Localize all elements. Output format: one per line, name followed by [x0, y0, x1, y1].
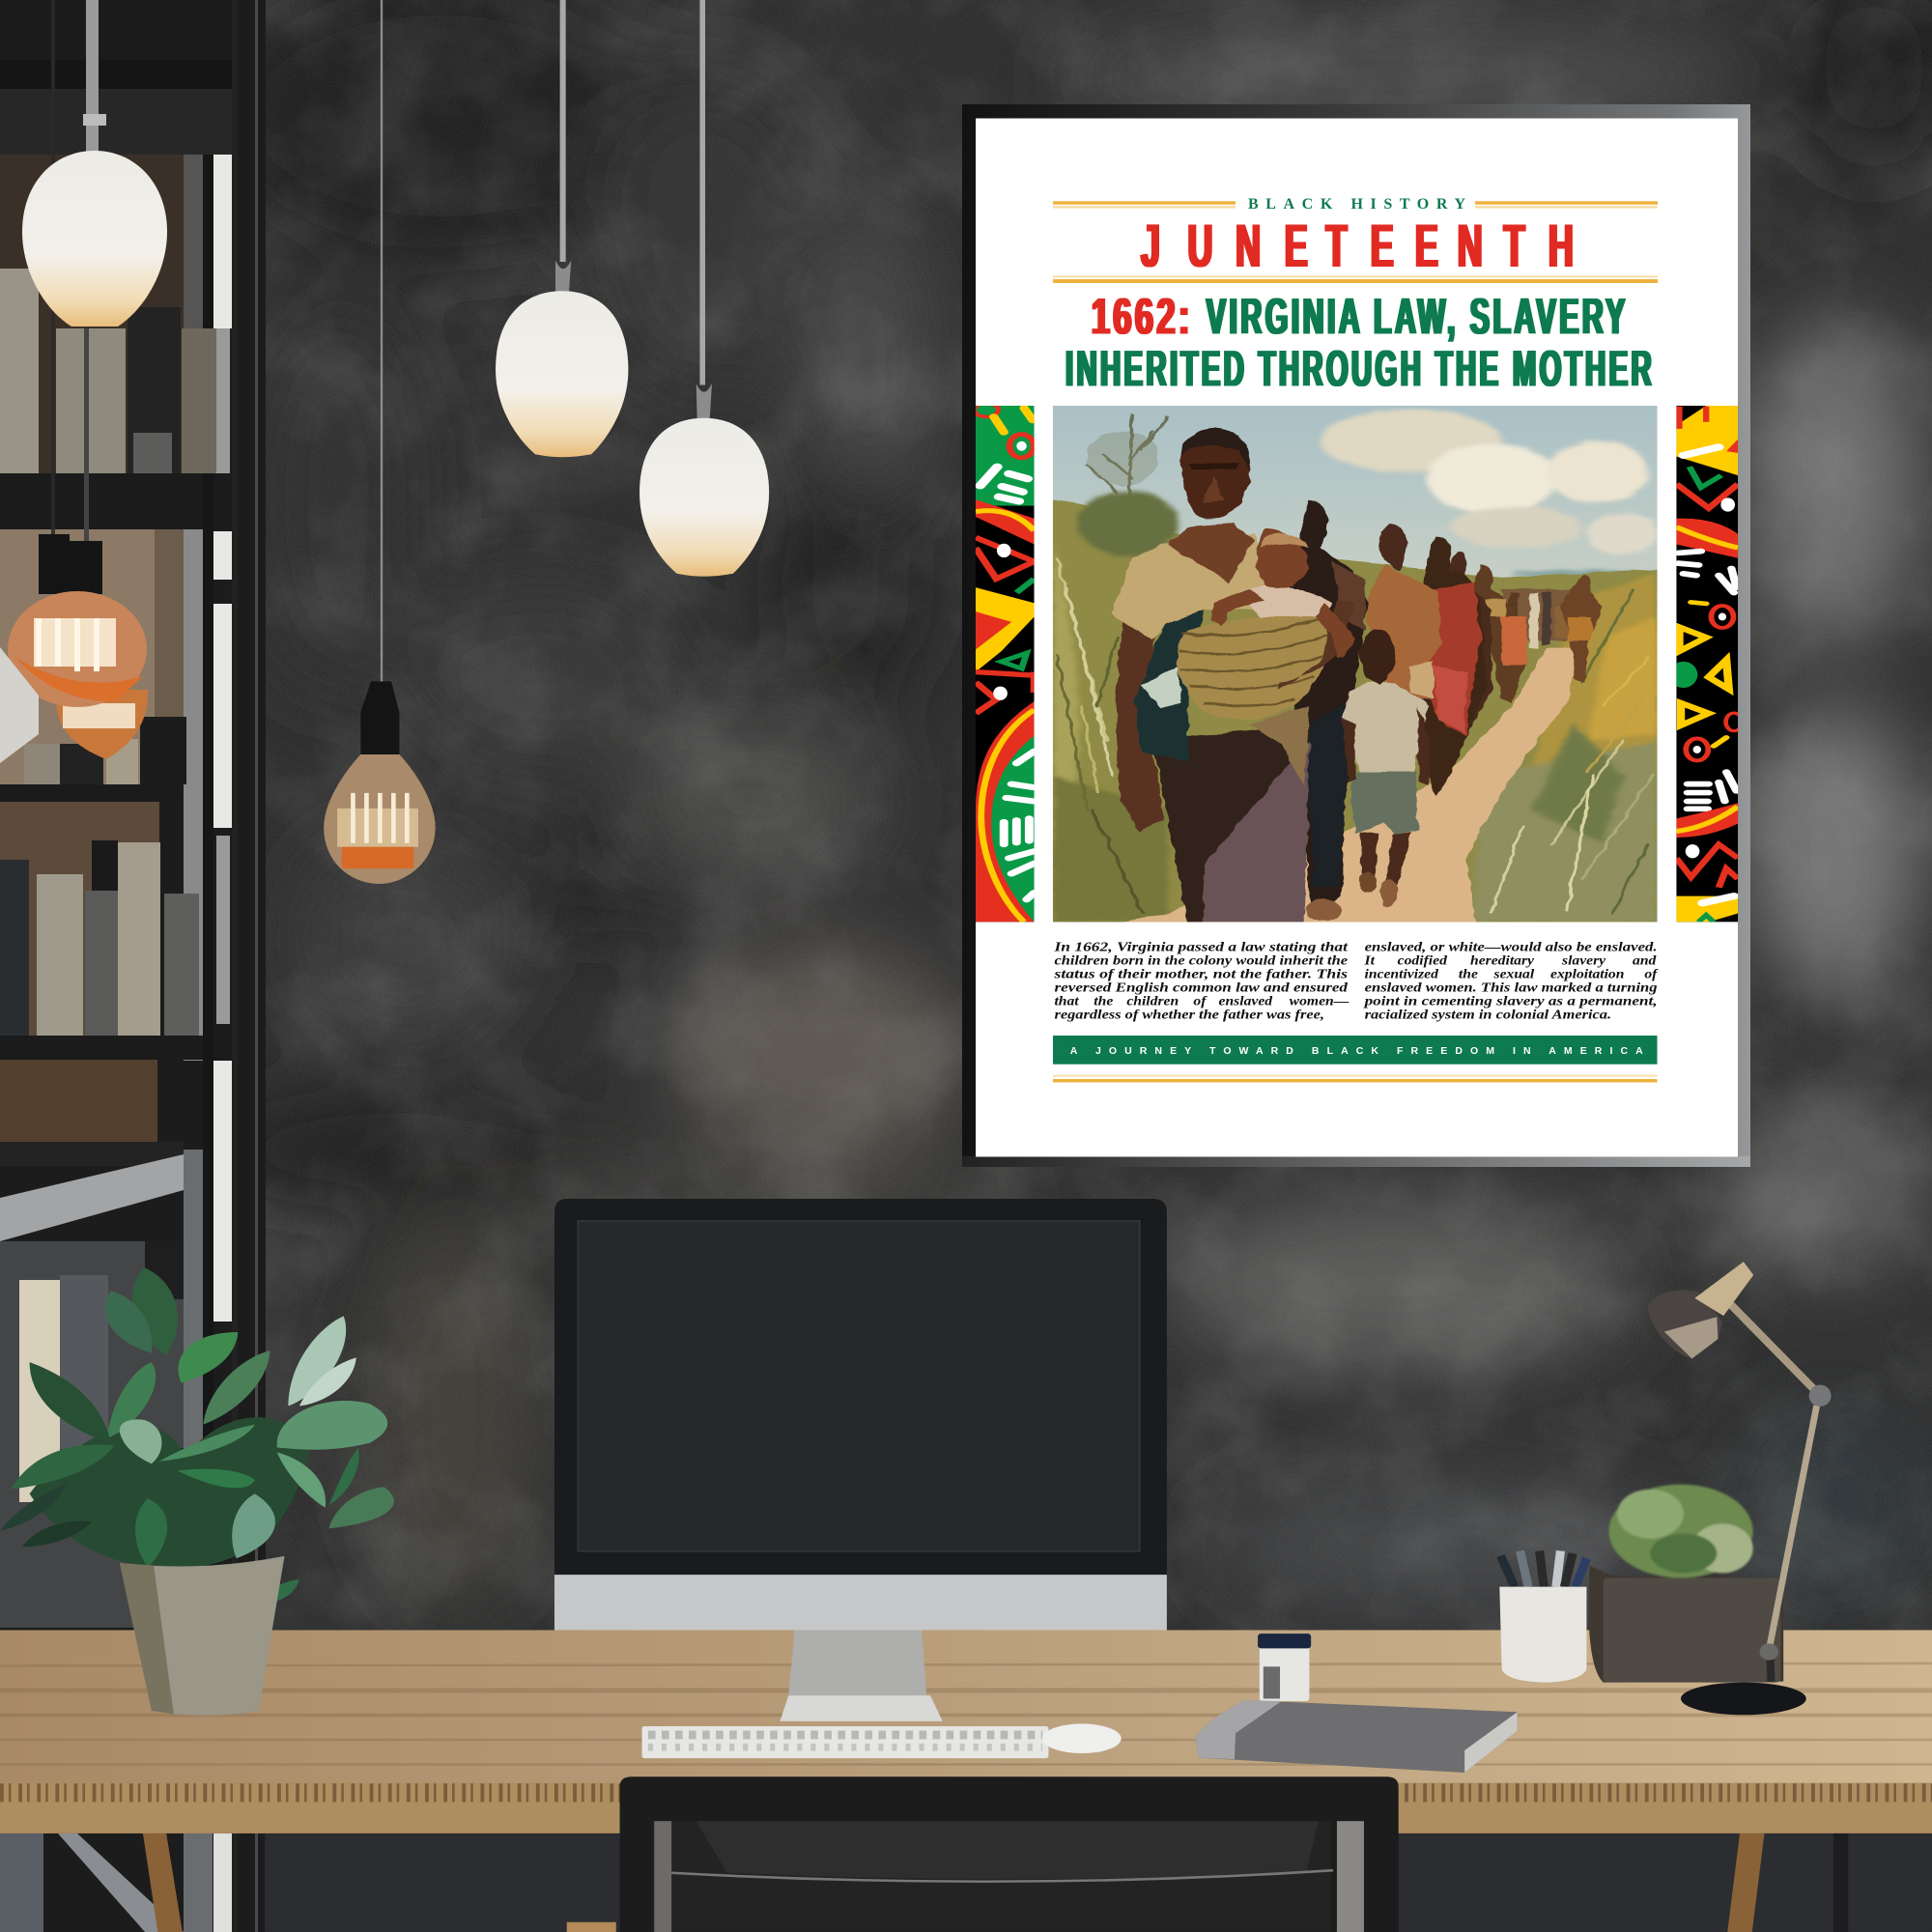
body text, column 2: incentivized	[1365, 967, 1439, 981]
pendant lamp and bulbs	[324, 0, 769, 884]
poster panel	[974, 118, 1742, 1157]
fifth figure	[1446, 551, 1492, 727]
poster paper	[976, 118, 1738, 1157]
body text, column 2: enslaved, or white—would also be enslaved.	[1365, 939, 1658, 953]
shelf boards	[0, 0, 237, 1060]
artwork group in zoom coordinates	[974, 400, 1742, 927]
dark cloth	[1135, 610, 1204, 761]
left pattern strip	[974, 403, 1035, 922]
shelving unit	[0, 0, 266, 1932]
right pattern strip	[1676, 406, 1739, 922]
body text, column 2: exploitation	[1550, 967, 1624, 981]
office chair	[620, 1776, 1399, 1932]
banner: A JOURNEY TOWARD BLACK FREEDOM IN AMERICA	[1070, 1045, 1643, 1057]
body text, column 2: slavery	[1561, 953, 1606, 968]
body text, column 1: women—	[1290, 994, 1350, 1009]
under desk shelf legs	[0, 1833, 232, 1932]
body text, column 1: enslaved	[1219, 994, 1273, 1009]
title: 1662:	[1092, 289, 1193, 346]
mother dress	[1153, 724, 1310, 927]
body text, column 1: status of their mother, not the father. This	[1053, 966, 1348, 980]
wooden desk	[0, 1630, 1932, 1932]
mother blouse	[1112, 534, 1269, 640]
jar	[1258, 1634, 1311, 1701]
body text, column 1: of	[1193, 994, 1208, 1009]
grass strokes	[1057, 558, 1653, 914]
shelf pendant lamp 1	[22, 0, 167, 327]
body text, column 1: reversed English common law and ensured	[1055, 980, 1348, 994]
ceiling pendant lamp 3	[639, 0, 769, 577]
body text, column 2: hereditary	[1470, 953, 1535, 968]
books	[0, 269, 216, 1502]
eyebrow: black history: BLACK HISTORY	[1248, 196, 1465, 213]
baby	[1238, 586, 1332, 616]
body text, column 2: and	[1633, 953, 1657, 968]
bottom gold rule	[1053, 1075, 1658, 1082]
dirt path	[1102, 648, 1577, 927]
gold rule under heading	[1053, 275, 1658, 283]
keyboard	[642, 1726, 1048, 1758]
poster frame	[962, 104, 1750, 1167]
woman third	[1365, 565, 1441, 699]
body text, column 2: the	[1459, 967, 1478, 981]
desk items right group	[1196, 1262, 1832, 1773]
shelf filament bulbs	[0, 0, 148, 763]
desk and monitor group in 1568 coordinates	[0, 1199, 1932, 1932]
body text, column 1: the	[1094, 994, 1114, 1009]
body text, column 2: enslaved women. This law marked a turning	[1365, 980, 1658, 994]
body text, column 1: that	[1054, 994, 1080, 1009]
boy	[1343, 682, 1429, 772]
pencil cup	[1499, 1550, 1586, 1683]
banner	[1053, 1036, 1658, 1065]
window strips	[213, 155, 232, 1321]
mother hand on basket	[1279, 600, 1355, 689]
desk lamp	[1648, 1262, 1832, 1715]
left plant	[0, 1267, 394, 1716]
iMac monitor	[554, 1199, 1167, 1721]
body text, column 2	[1363, 939, 1660, 1021]
body text, column 1	[1053, 939, 1350, 1021]
filament bulb pendant	[324, 0, 436, 884]
man fourth, red wrap	[1415, 536, 1487, 796]
top gold rules	[1053, 201, 1658, 209]
title: VIRGINIA LAW, SLAVERY	[1207, 289, 1629, 346]
body text, column 1: In 1662, Virginia passed a law stating that	[1053, 939, 1350, 953]
man behind	[1289, 500, 1369, 902]
basket	[1177, 607, 1328, 720]
body text, column 1: regardless of whether the father was free,	[1055, 1007, 1324, 1021]
body text, column 2: It	[1363, 953, 1376, 968]
body text, column 2: codified	[1398, 953, 1448, 968]
mother head	[1180, 428, 1250, 519]
title	[1065, 289, 1655, 398]
body text, column 1: children born in the colony would inherit the	[1055, 952, 1348, 967]
body text, column 2: point in cementing slavery as a permanent,	[1363, 993, 1658, 1008]
grass	[1041, 499, 1668, 927]
body text, column 1: children	[1126, 994, 1179, 1009]
painting: enslaved family walking	[1041, 400, 1668, 927]
body text, column 2: of	[1644, 967, 1660, 981]
notebook	[1196, 1700, 1518, 1773]
mouse	[1042, 1723, 1122, 1753]
mother arm	[1115, 620, 1163, 833]
body text, column 2: sexual	[1492, 967, 1535, 981]
distant line of people	[1471, 565, 1604, 703]
ceiling pendant lamp 2	[496, 0, 628, 457]
potted plant on desk	[1589, 1485, 1783, 1683]
body text, column 2: racialized system in colonial America.	[1365, 1007, 1611, 1021]
heading: juneteenth: JUNETEENTH	[1141, 212, 1574, 280]
